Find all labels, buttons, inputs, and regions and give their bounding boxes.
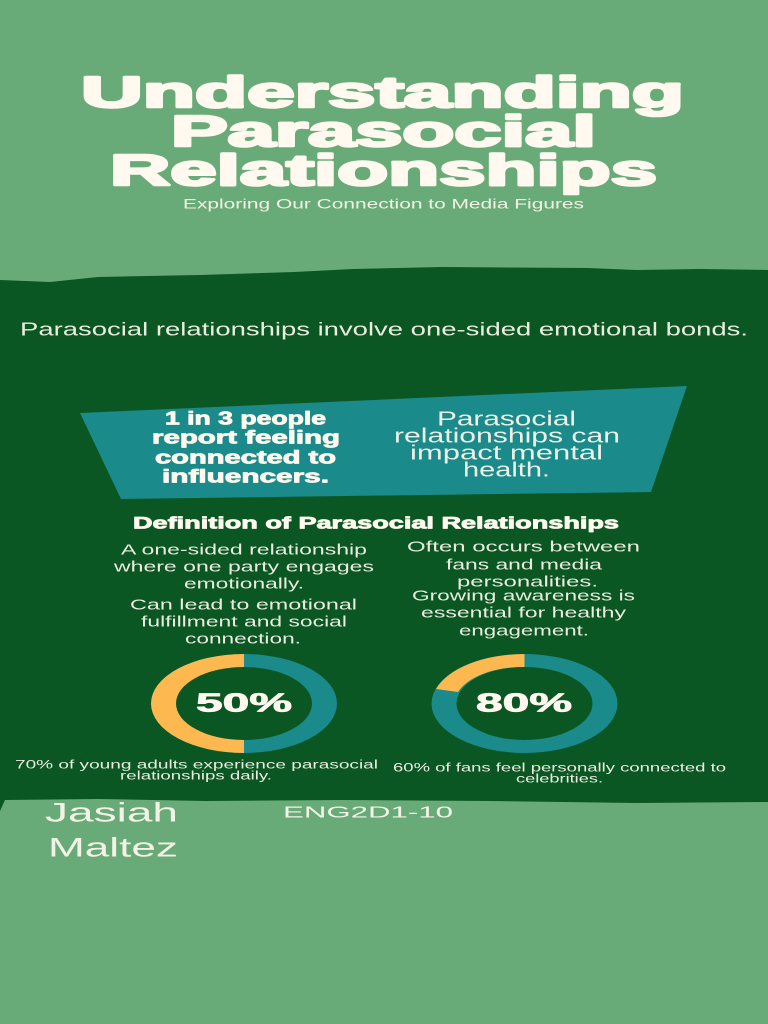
subtitle: Exploring Our Connection to Media Figures (183, 196, 584, 212)
text: mental health impact: impact mental (410, 443, 603, 465)
course code: ENG2D1-10 (283, 805, 453, 822)
text: growing awareness: engagement. (459, 623, 589, 640)
donut chart: 50% (151, 654, 337, 753)
caption: fans statistic: 60% of fans feel personally connected to (393, 763, 726, 775)
text: growing awareness: Growing awareness is (412, 588, 635, 605)
title: Parasocial (171, 107, 596, 156)
author name (45, 798, 178, 863)
donut chart: 80% (432, 654, 618, 753)
text: fans and media personalities: Often occurs between (407, 539, 640, 556)
title: Relationships (110, 146, 657, 195)
caption: fans statistic (393, 763, 726, 786)
stat: 1 in 3 people: influencers. (162, 467, 329, 487)
stat: 1 in 3 people (152, 409, 340, 487)
text: growing awareness: essential for healthy (421, 605, 627, 622)
text: one-sided relationship: emotionally. (184, 576, 304, 593)
donut chart: 50%: 50% (196, 688, 292, 718)
title: Understanding (81, 68, 684, 117)
title (81, 68, 684, 195)
author name: Jasiah (45, 798, 178, 828)
text: mental health impact: Parasocial (437, 409, 576, 431)
author name: Maltez (48, 833, 178, 863)
text: growing awareness (412, 588, 635, 640)
text: emotional fulfillment: connection. (185, 631, 301, 648)
stat: 1 in 3 people: 1 in 3 people (165, 409, 326, 429)
text: mental health impact: relationships can (394, 426, 620, 448)
caption: young adults statistic: 70% of young adults experience parasocial (15, 760, 378, 772)
caption: young adults statistic: relationships daily. (120, 771, 272, 783)
text: fans and media personalities (407, 539, 640, 591)
panel: teal banner (80, 386, 687, 499)
text: mental health impact: health. (463, 460, 550, 482)
text: fans and media personalities: fans and media (446, 557, 603, 574)
text: one-sided relationship (112, 542, 374, 593)
text: emotional fulfillment (130, 597, 357, 648)
donut chart: 80%: 80% (476, 688, 572, 718)
text: one-sided relationship: A one-sided relationship (121, 542, 367, 559)
text: one-sided relationship: where one party engages (112, 559, 374, 576)
text: emotional fulfillment: Can lead to emotional (130, 597, 357, 614)
stat: 1 in 3 people: connected to (155, 448, 336, 468)
intro statement: Parasocial relationships involve one-sided emotional bonds. (20, 320, 748, 340)
text: emotional fulfillment: fulfillment and social (141, 614, 347, 631)
section heading: Definition of Parasocial Relationships (133, 514, 619, 533)
caption: young adults statistic (15, 760, 378, 783)
panel: dark green torn band (0, 267, 768, 811)
caption: fans statistic: celebrities. (516, 774, 603, 786)
stat: 1 in 3 people: report feeling (152, 428, 340, 448)
text: fans and media personalities: personalities. (457, 574, 598, 591)
text: mental health impact (394, 409, 620, 482)
